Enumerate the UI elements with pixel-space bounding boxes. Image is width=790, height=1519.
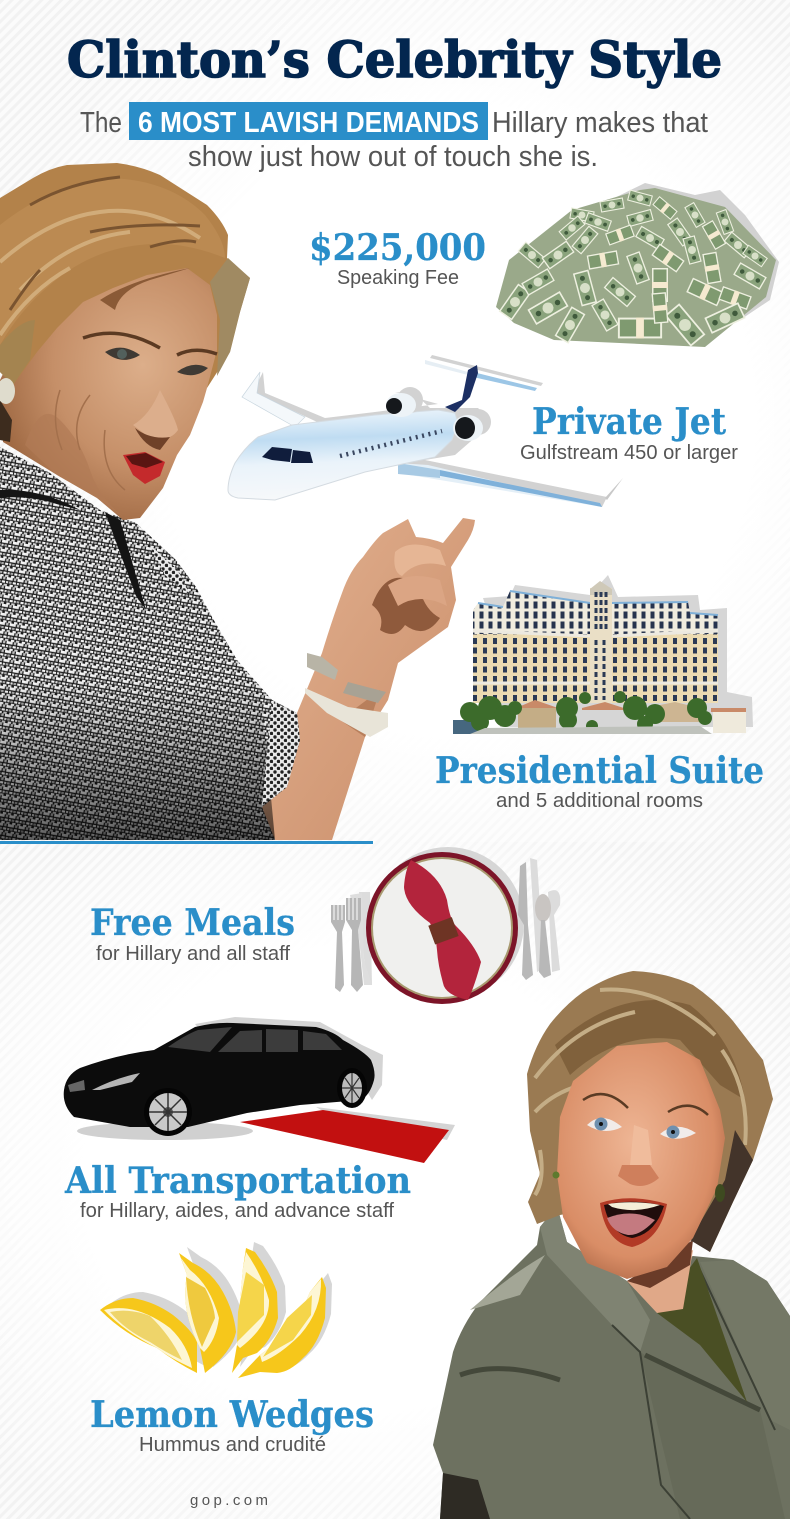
item: private jet text: Private Jet — [532, 401, 726, 443]
subtitle — [80, 102, 708, 173]
hotel tower — [590, 588, 612, 703]
eyes — [83, 333, 217, 355]
mouth — [600, 1198, 667, 1247]
item: private jet text: Gulfstream 450 or larger — [520, 442, 738, 464]
near wing — [398, 463, 602, 507]
arm and hand — [262, 518, 475, 840]
fuselage — [228, 410, 458, 500]
icon: hotel — [453, 575, 753, 734]
hotel lower floors — [473, 634, 718, 703]
wheels — [144, 1088, 192, 1136]
forks — [331, 892, 372, 992]
lemon shadows — [110, 1242, 332, 1374]
jet shadow — [253, 372, 607, 507]
ground shadow — [77, 1122, 253, 1140]
earrings — [552, 1172, 560, 1178]
caption: Speaking Fee — [337, 267, 459, 289]
item: lemon wedges text: Hummus and crudité — [139, 1434, 326, 1456]
nose — [618, 1165, 659, 1186]
background: top panel — [0, 0, 790, 842]
knife and spoon — [518, 858, 560, 980]
title: Clinton’s Celebrity Style — [67, 30, 722, 89]
item: suite text — [435, 750, 764, 812]
photo: Hillary laughing (right) — [433, 971, 790, 1519]
bracelets — [305, 688, 388, 737]
wedge 4 — [238, 1277, 326, 1378]
car windows — [168, 1027, 342, 1052]
item: suite text: Presidential Suite — [435, 750, 764, 792]
item: free meals text: for Hillary and all staff — [96, 943, 290, 965]
subtitle: Hillary makes that — [492, 107, 708, 139]
hair — [0, 163, 250, 388]
car shadow — [195, 1017, 383, 1100]
item: suite text: and 5 additional rooms — [496, 790, 703, 812]
jacket — [0, 447, 300, 840]
item: lemon wedges text — [90, 1394, 374, 1456]
wedge 2 — [179, 1253, 236, 1373]
item: transportation text — [64, 1160, 411, 1222]
item: transportation text: All Transportation — [64, 1160, 411, 1202]
subtitle: show just how out of touch she is. — [188, 141, 598, 173]
highlight bar — [129, 102, 488, 140]
trees — [460, 691, 712, 732]
earring — [0, 378, 15, 404]
hair — [527, 971, 773, 1252]
jacket — [433, 1206, 790, 1519]
shoreline — [470, 726, 712, 734]
carpet shadow — [316, 1107, 455, 1140]
hotel upper floors — [473, 591, 718, 636]
tail — [425, 360, 468, 375]
icon: private jet — [228, 355, 623, 507]
icon: money pile — [496, 183, 779, 347]
left bungalow and plaza — [453, 720, 483, 734]
face — [0, 262, 230, 520]
plate — [372, 847, 524, 999]
item: free meals text: Free Meals — [90, 902, 295, 944]
credit: gop.com — [190, 1492, 268, 1509]
windshield — [262, 447, 313, 463]
engines — [397, 387, 423, 413]
amount: $225,000 — [309, 227, 486, 269]
icon: limousine on red carpet — [64, 1017, 455, 1163]
photo: Hillary pointing (left) — [0, 163, 475, 840]
nose — [133, 390, 178, 439]
background: bottom panel — [0, 842, 790, 1519]
item: private jet text — [520, 401, 738, 464]
car body — [64, 1023, 375, 1127]
face — [557, 1042, 725, 1279]
napkin — [404, 860, 481, 1000]
wedge 1 — [100, 1298, 197, 1373]
shirt and neck — [657, 1258, 747, 1402]
far wing — [242, 372, 305, 427]
item: lemon wedges text: Lemon Wedges — [90, 1394, 374, 1436]
subtitle: 6 MOST LAVISH DEMANDS — [138, 107, 479, 139]
item: transportation text: for Hillary, aides, and advance staff — [80, 1200, 394, 1222]
subtitle: The — [80, 107, 122, 139]
polka dot blouse — [262, 702, 300, 805]
red carpet — [240, 1110, 449, 1163]
icon: lemon wedges — [100, 1242, 332, 1378]
icon: place setting — [331, 847, 560, 1004]
wedge 3 — [232, 1248, 278, 1373]
hotel shadow — [483, 575, 753, 727]
item: free meals text — [90, 902, 295, 965]
lips — [123, 452, 165, 484]
eyes — [587, 1118, 622, 1131]
item: speaking fee — [309, 227, 486, 289]
divider rule — [0, 841, 373, 844]
